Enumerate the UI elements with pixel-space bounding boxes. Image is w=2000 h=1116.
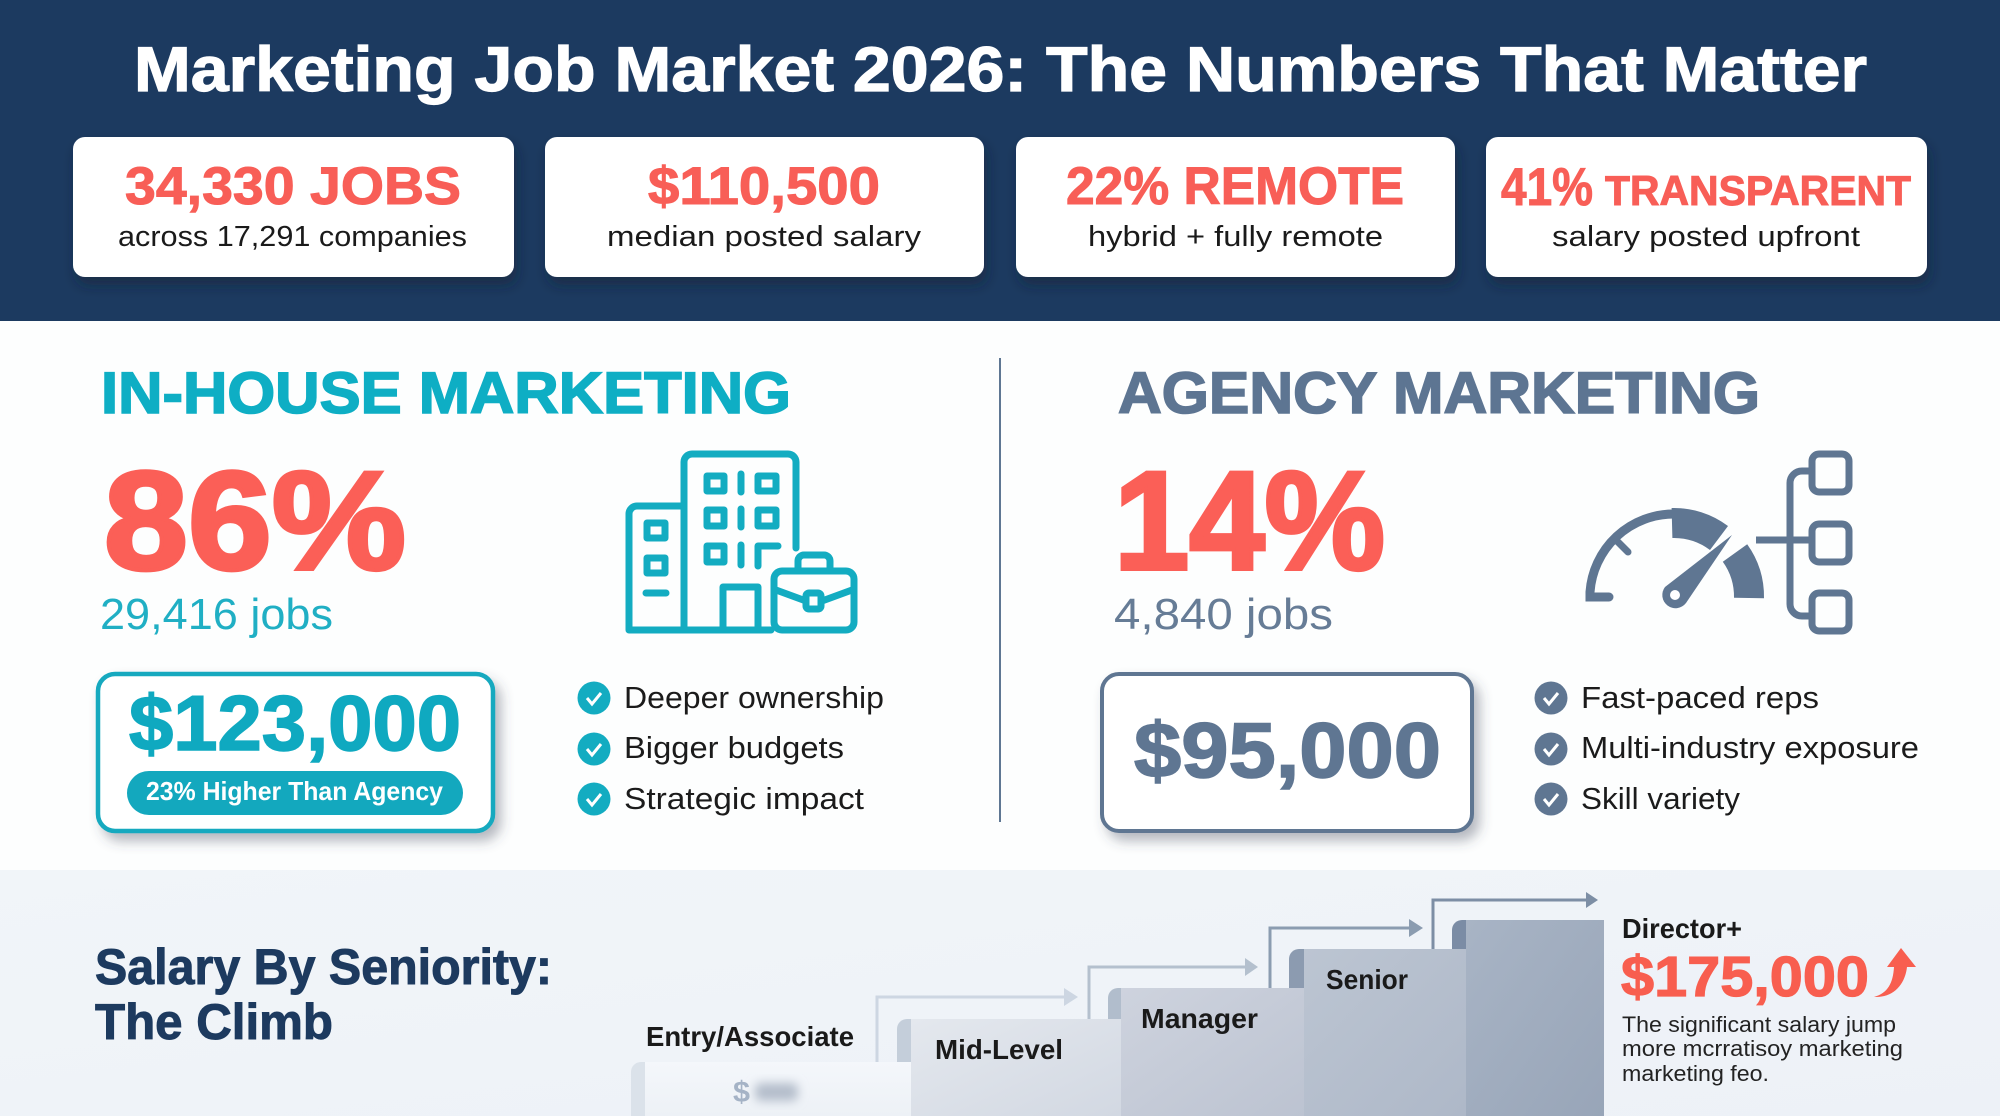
arrow: mid to manager — [1089, 958, 1258, 1019]
stat card: median salary — [545, 137, 984, 277]
step: manager: Manager — [1141, 1003, 1258, 1034]
stat card: jobs: across 17,291 companies — [118, 221, 467, 253]
checklist: in-house benefits: Deeper ownership — [624, 680, 884, 715]
section heading: The Climb — [95, 994, 333, 1050]
salary box: agency — [1102, 674, 1472, 831]
checklist: in-house benefits — [578, 680, 884, 816]
step: entry: $ — [733, 1076, 750, 1109]
label: entry/associate: Entry/Associate — [646, 1021, 854, 1052]
description text: marketing feo. — [1622, 1061, 1769, 1086]
badge — [127, 771, 463, 815]
badge: 23% Higher Than Agency — [146, 776, 444, 806]
arrow: manager to senior — [1270, 919, 1423, 988]
checklist: agency benefits: Multi-industry exposure — [1581, 730, 1919, 765]
icon: up arrow — [1874, 948, 1916, 997]
panel: in-house marketing — [98, 361, 884, 831]
step: mid-level: Mid-Level — [935, 1034, 1063, 1065]
icon: speedometer and network — [1590, 454, 1849, 631]
stat card: transparent: TRANSPARENT — [1605, 167, 1911, 214]
stat card: jobs: 34,330 JOBS — [125, 157, 461, 216]
job count: 4,840 jobs — [1114, 590, 1333, 639]
stat card: transparent: salary posted upfront — [1552, 221, 1860, 253]
step: senior: Senior — [1326, 964, 1408, 995]
heading: in-house: IN-HOUSE MARKETING — [101, 361, 791, 426]
step: senior — [1289, 949, 1466, 1116]
description text: more mcrratisoy marketing — [1622, 1036, 1903, 1061]
description text: The significant salary jump — [1622, 1012, 1896, 1037]
description text — [1622, 1012, 1903, 1086]
panel: agency marketing — [1102, 361, 1919, 831]
stat card: transparent — [1486, 137, 1927, 277]
stat: 14%: 14% — [1114, 442, 1385, 599]
callout: director salary: $175,000 — [1621, 945, 1869, 1009]
heading: agency: AGENCY MARKETING — [1118, 361, 1760, 426]
checklist: agency benefits: Skill variety — [1581, 781, 1740, 816]
salary box: agency: $95,000 — [1134, 706, 1441, 794]
panel: salary by seniority — [0, 870, 2000, 1116]
step: entry — [631, 1062, 911, 1116]
step: manager — [1108, 988, 1304, 1116]
callout: director salary: Director+ — [1622, 913, 1742, 944]
checklist: in-house benefits: Strategic impact — [624, 781, 864, 816]
job count: 29,416 jobs — [100, 590, 333, 639]
stat card: median salary: $110,500 — [648, 157, 880, 216]
panel: header band — [0, 0, 2000, 321]
stat card: transparent: 41% — [1501, 158, 1593, 217]
callout: director salary — [1621, 913, 1916, 1086]
stat card: remote — [1016, 137, 1455, 277]
stat: 86%: 86% — [104, 442, 406, 599]
step: mid-level — [897, 1019, 1121, 1116]
section heading: Salary By Seniority: — [95, 939, 552, 995]
stat card: remote: 22% REMOTE — [1066, 157, 1404, 216]
checklist: agency benefits — [1534, 680, 1919, 816]
stat card: jobs — [73, 137, 514, 277]
stat card: median salary: median posted salary — [607, 221, 922, 253]
section heading — [95, 939, 552, 1050]
salary box: in-house: $123,000 — [129, 679, 461, 767]
checklist: agency benefits: Fast-paced reps — [1581, 680, 1819, 715]
stat card: remote: hybrid + fully remote — [1088, 221, 1383, 253]
title: Marketing Job Market 2026: The Numbers That Matter — [134, 35, 1867, 105]
arrow: senior to director — [1433, 892, 1598, 949]
salary box: in-house — [98, 674, 493, 831]
arrow: entry to mid — [877, 988, 1078, 1062]
checklist: in-house benefits: Bigger budgets — [624, 730, 844, 765]
icon: office building and briefcase — [629, 454, 854, 630]
step: director — [1452, 920, 1604, 1116]
